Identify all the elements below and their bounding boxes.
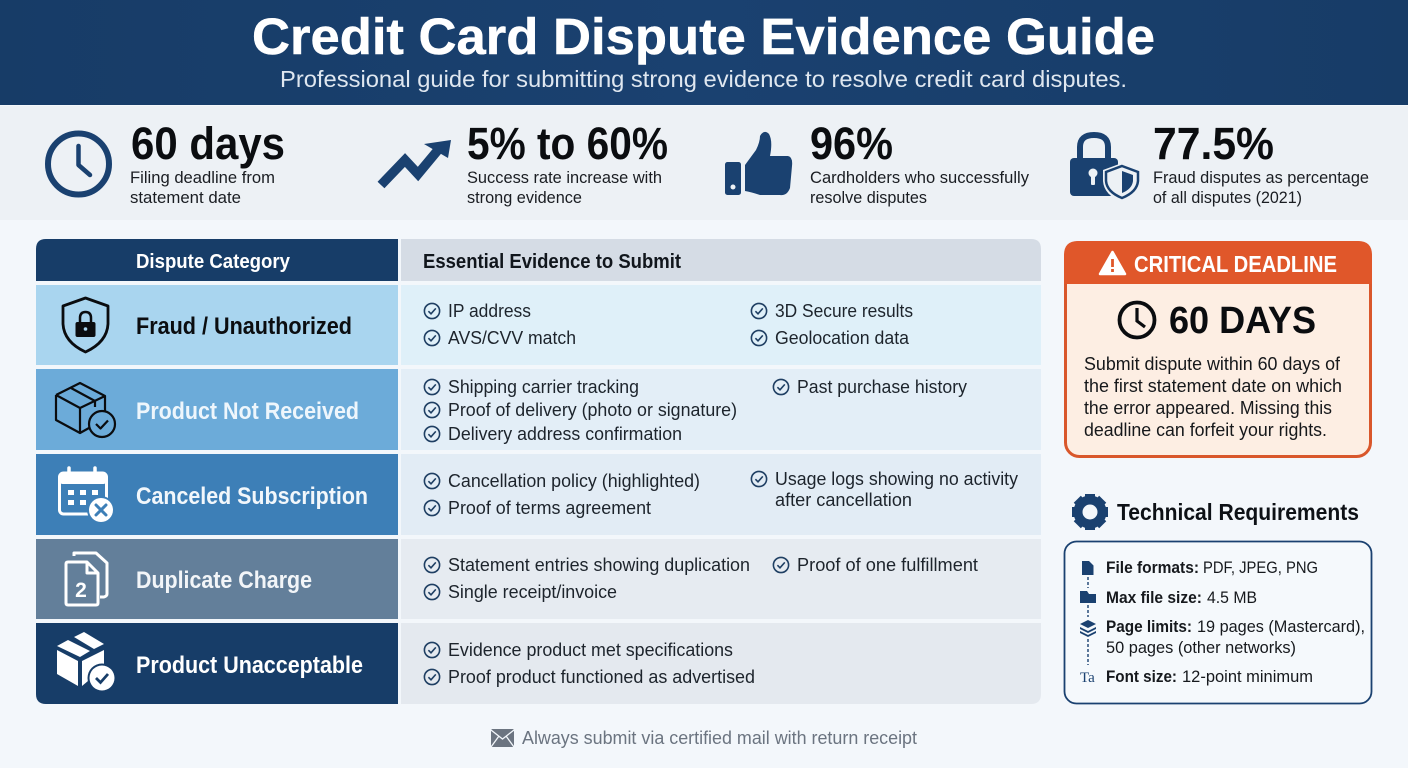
- icon: padlock and shield: [1070, 135, 1141, 202]
- stat: 96%: 96%: [810, 118, 893, 169]
- panel: technical requirements: Font size:: [1106, 668, 1177, 686]
- panel: technical requirements: 12-point minimum: [1182, 668, 1313, 686]
- panel: critical deadline: 60 DAYS: [1169, 300, 1316, 342]
- evidence table: [36, 239, 1041, 704]
- panel: technical requirements: 19 pages (Mastercard),: [1197, 618, 1365, 636]
- icon: shield lock: [63, 298, 108, 352]
- table header: Dispute Category: [136, 251, 291, 273]
- stats band: [0, 106, 1408, 220]
- row: product not received: Shipping carrier tracking: [448, 377, 639, 397]
- stat: 96%: resolve disputes: [810, 188, 927, 207]
- icon: file: [1082, 561, 1094, 575]
- subtitle: Professional guide for submitting strong evidence to resolve credit card disputes.: [280, 66, 1127, 92]
- stat: 77.5%: [1070, 118, 1369, 207]
- panel: technical requirements: 50 pages (other networks): [1106, 639, 1296, 657]
- panel: critical deadline: CRITICAL DEADLINE: [1134, 251, 1337, 277]
- row: fraud: AVS/CVV match: [448, 328, 576, 348]
- table header: Essential Evidence to Submit: [423, 251, 681, 273]
- row: product not received: Past purchase history: [797, 377, 967, 397]
- row: fraud: Geolocation data: [775, 328, 910, 348]
- panel: critical deadline: Submit dispute within 60 days of: [1084, 354, 1341, 374]
- panel: technical requirements: 4.5 MB: [1207, 589, 1257, 607]
- row: fraud: 3D Secure results: [775, 301, 913, 321]
- stat: 60 days: Filing deadline from: [130, 168, 275, 187]
- stat: 60 days: [48, 118, 285, 207]
- row: canceled subscription: Canceled Subscription: [136, 483, 368, 510]
- stat: 77.5%: of all disputes (2021): [1153, 188, 1302, 207]
- panel: critical deadline: [1064, 241, 1372, 456]
- row: product not received: Delivery address confirmation: [448, 424, 682, 444]
- icon: thumbs up: [725, 132, 792, 195]
- row: canceled subscription: [36, 454, 1041, 535]
- row: product not received: Proof of delivery (photo or signature): [448, 400, 737, 420]
- stat: 60 days: 60 days: [131, 118, 285, 169]
- icon: warning triangle: [1100, 252, 1125, 274]
- row: duplicate charge: Duplicate Charge: [136, 567, 312, 594]
- icon: clock: [1120, 302, 1154, 338]
- row: fraud: Fraud / Unauthorized: [136, 313, 352, 340]
- row: canceled subscription: Usage logs showing no activity: [775, 469, 1018, 489]
- row: fraud: [36, 285, 1041, 365]
- row: fraud: IP address: [448, 301, 531, 321]
- stat: 5% to 60%: 5% to 60%: [467, 118, 668, 169]
- row: duplicate charge: [36, 539, 1041, 619]
- row: duplicate charge: Proof of one fulfillment: [797, 555, 978, 575]
- stat: 96%: Cardholders who successfully: [810, 168, 1029, 187]
- icon: folder: [1080, 591, 1096, 603]
- icon: clock: [48, 134, 109, 194]
- footer note: Always submit via certified mail with return receipt: [522, 728, 917, 748]
- icon: box with check: [56, 383, 115, 437]
- panel: technical requirements: [1064, 487, 1372, 704]
- icon: font size: Ta: [1080, 670, 1095, 686]
- panel: technical requirements: Technical Requirements: [1117, 499, 1359, 525]
- table header: [36, 239, 1041, 281]
- panel: technical requirements: PDF, JPEG, PNG: [1203, 559, 1318, 577]
- icon: solid box with check: [57, 632, 116, 692]
- row: duplicate charge: Single receipt/invoice: [448, 582, 617, 602]
- header banner: [0, 0, 1408, 105]
- panel: critical deadline: the first statement date on which: [1084, 376, 1342, 396]
- icon: calendar with x: [60, 468, 115, 524]
- row: product unacceptable: Product Unacceptable: [136, 652, 363, 679]
- panel: technical requirements: Page limits:: [1106, 618, 1192, 636]
- panel: critical deadline: the error appeared. Missing this: [1084, 398, 1332, 418]
- row: canceled subscription: Cancellation policy (highlighted): [448, 471, 700, 491]
- icon: gear: [1065, 487, 1115, 537]
- row: canceled subscription: Proof of terms agreement: [448, 498, 651, 518]
- stat: 96%: [725, 118, 1029, 207]
- stat: 5% to 60%: [381, 118, 668, 207]
- stat: 60 days: statement date: [130, 188, 241, 207]
- row: duplicate charge: Statement entries showing duplication: [448, 555, 750, 575]
- stat: 5% to 60%: strong evidence: [467, 188, 582, 207]
- row: product unacceptable: Proof product functioned as advertised: [448, 667, 755, 687]
- panel: critical deadline: deadline can forfeit your rights.: [1084, 420, 1327, 440]
- icon: duplicate documents: [66, 553, 107, 605]
- row: canceled subscription: after cancellation: [775, 490, 912, 510]
- title: Credit Card Dispute Evidence Guide: [252, 8, 1155, 65]
- row: product unacceptable: [36, 623, 1041, 704]
- panel: technical requirements: File formats:: [1106, 559, 1199, 577]
- icon: layers: [1080, 620, 1096, 637]
- row: product not received: Product Not Received: [136, 398, 359, 425]
- stat: 77.5%: Fraud disputes as percentage: [1153, 168, 1369, 187]
- icon: envelope: [491, 729, 514, 747]
- row: product not received: [36, 369, 1041, 450]
- stat: 5% to 60%: Success rate increase with: [467, 168, 662, 187]
- row: product unacceptable: Evidence product met specifications: [448, 640, 733, 660]
- stat: 77.5%: 77.5%: [1153, 118, 1274, 169]
- icon: duplicate documents: 2: [75, 579, 87, 602]
- icon: rising arrow: [381, 140, 451, 185]
- panel: technical requirements: Max file size:: [1106, 589, 1202, 607]
